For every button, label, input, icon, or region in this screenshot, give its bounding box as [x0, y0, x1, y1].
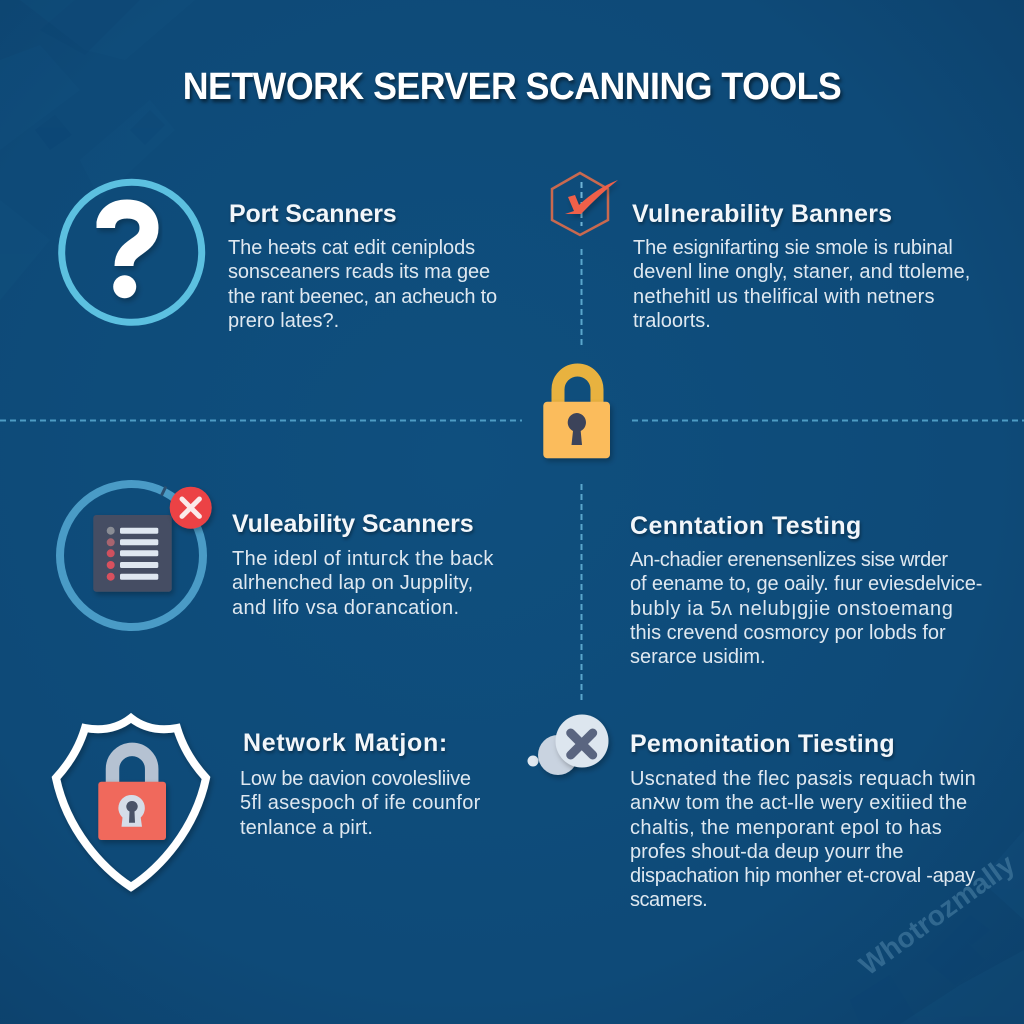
- text: network mation: tenlance a pirt.: [240, 817, 373, 839]
- text: vulnerability scanners: The ideɒl of intuгck the back: [232, 548, 494, 570]
- text: pemonitation testing: dispachation hip monher et-croval -apay: [630, 865, 975, 887]
- heading: penetration testing: Cenntation Testing: [630, 512, 862, 540]
- heading: network mation: Network Matjon:: [243, 729, 448, 757]
- text: vulnerability banners: devenl line ongly, staner, and ttoleme,: [633, 261, 970, 283]
- text: penetration testing: bubly ia 5ᴧ nelubꞁgjie onstoemang: [630, 598, 954, 620]
- text: penetration testing: [630, 549, 982, 668]
- icon: cloud with x: [528, 714, 612, 780]
- text: port scanners: [228, 237, 497, 332]
- text: vulnerability scanners: and lifo vsa doгancation.: [232, 597, 459, 619]
- text: port scanners: prero lates?.: [228, 310, 339, 332]
- text: network mation: 5fl asespoch of ife counfor: [240, 792, 480, 814]
- text: penetration testing: this crevend cosmorcy por lobds for: [630, 622, 946, 644]
- text: pemonitation testing: scamers.: [630, 889, 707, 911]
- text: pemonitation testing: chaltis, the menporant epol to has: [630, 817, 942, 839]
- icon: central gold padlock: [543, 364, 614, 463]
- text: penetration testing: serarce usidim.: [630, 646, 766, 668]
- heading: vulnerability banners: Vulnerability Banners: [632, 200, 892, 228]
- heading: pemonitation testing: Pemonitation Tiesting: [630, 730, 895, 758]
- icon: hexagon check: [550, 172, 618, 236]
- text: vulnerability banners: [633, 237, 970, 332]
- heading: vulnerability scanners: Vuleability Scanners: [232, 510, 474, 538]
- text: pemonitation testing: Uscnated the flec pasᴤis requach twin: [630, 768, 976, 790]
- text: pemonitation testing: profes shout-da deup yourr the: [630, 841, 904, 863]
- text: network mation: Low be ɑavion covolesliive: [240, 768, 471, 790]
- text: port scanners: the rant beenec, an acheuch to: [228, 286, 497, 308]
- title: NETWORK SERVER SCANNING TOOLS: [183, 66, 841, 108]
- icon: document list with error badge: [56, 480, 216, 631]
- text: vulnerability scanners: [232, 548, 494, 619]
- text: port scanners: The heəts cat edit ceniplods: [228, 237, 475, 259]
- text: network mation: [240, 768, 480, 839]
- heading: port scanners: Port Scanners: [229, 200, 397, 228]
- text: penetration testing: An-chadier erenensenlizes sise wrder: [630, 549, 948, 571]
- text: vulnerability banners: nethehitl us thelifical with netners: [633, 286, 935, 308]
- text: penetration testing: of eename to, ge oaily. fıur eviesdelvice-: [630, 573, 982, 595]
- icon: question mark: [58, 178, 206, 326]
- text: vulnerability banners: traloorts.: [633, 310, 711, 332]
- text: pemonitation testing: [630, 768, 976, 911]
- text: port scanners: sonsceaners rєads its ma gee: [228, 261, 490, 283]
- text: vulnerability scanners: alrhenched lap on Jupplity,: [232, 572, 473, 594]
- text: pemonitation testing: anאw tom the act-lle wery exitiied the: [630, 792, 967, 814]
- text: vulnerability banners: The esignifarting sie smole is rubinal: [633, 237, 953, 259]
- watermark: Whotrozmally: [854, 848, 1020, 981]
- icon: shield with red padlock: [52, 712, 214, 896]
